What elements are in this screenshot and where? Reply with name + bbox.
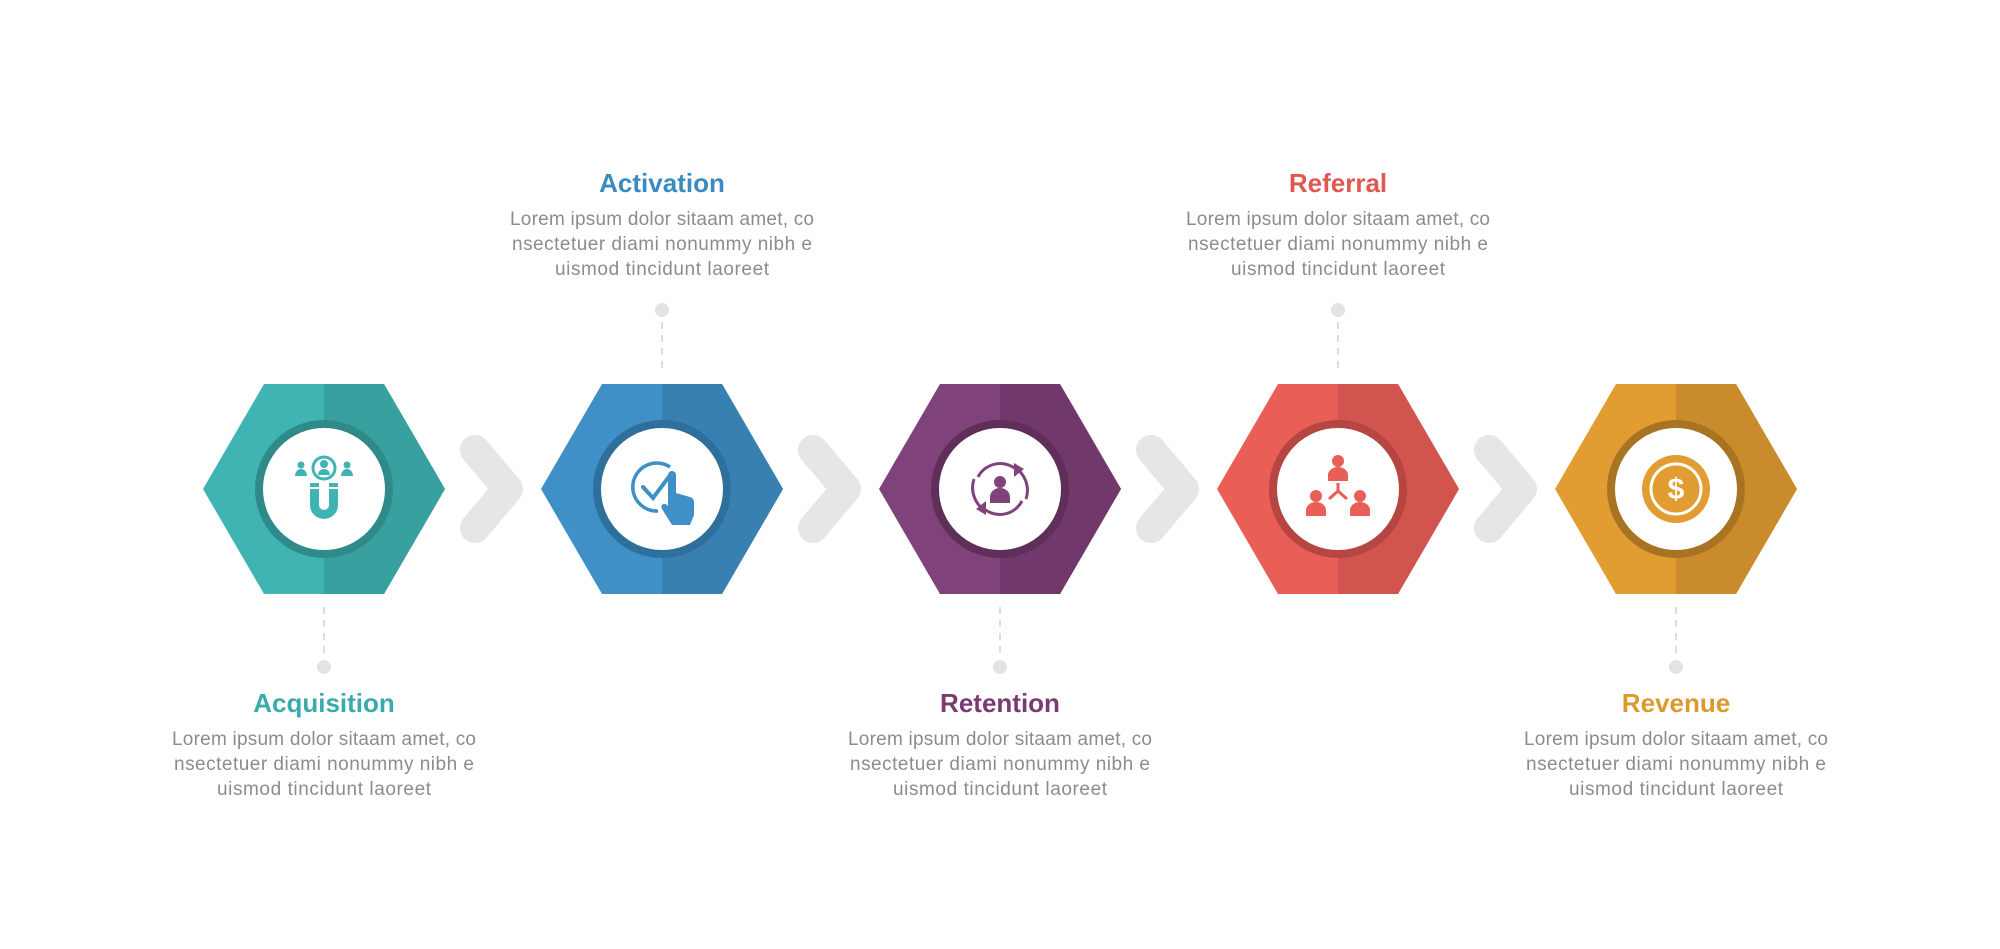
- text: activation: nsectetuer diami nonummy nibh e: [512, 234, 812, 255]
- title: retention: Retention: [940, 688, 1060, 718]
- step: referral: [1186, 168, 1490, 594]
- icon: dollar coin: [1642, 455, 1710, 523]
- text: referral: [1186, 209, 1490, 280]
- text: retention: uismod tincidunt laoreet: [893, 779, 1108, 800]
- icon: click check: [633, 463, 694, 525]
- text: acquisition: nsectetuer diami nonummy nibh e: [174, 754, 474, 775]
- title: referral: Referral: [1289, 168, 1387, 198]
- arrow: chevron 3: [1151, 450, 1184, 528]
- text: acquisition: Lorem ipsum dolor sitaam amet, co: [172, 729, 476, 750]
- text: acquisition: uismod tincidunt laoreet: [217, 779, 432, 800]
- text: revenue: uismod tincidunt laoreet: [1569, 779, 1784, 800]
- icon: dollar coin: $: [1668, 473, 1685, 506]
- connector: revenue: [1669, 607, 1683, 674]
- step: retention: [848, 384, 1152, 800]
- title: revenue: Revenue: [1622, 688, 1730, 718]
- icon: retention cycle: [973, 463, 1027, 515]
- arrow: chevron 4: [1489, 450, 1522, 528]
- text: revenue: Lorem ipsum dolor sitaam amet, co: [1524, 729, 1828, 750]
- connector: activation: [655, 303, 669, 372]
- connector: referral: [1331, 303, 1345, 372]
- step: revenue: [1524, 384, 1828, 800]
- icon: referral network: [1306, 455, 1370, 516]
- arrow: chevron 1: [475, 450, 508, 528]
- text: activation: Lorem ipsum dolor sitaam amet, co: [510, 209, 814, 230]
- hexagon: revenue: [1555, 384, 1797, 594]
- step: activation: [510, 168, 814, 594]
- hexagon: retention: [879, 384, 1121, 594]
- text: retention: nsectetuer diami nonummy nibh e: [850, 754, 1150, 775]
- text: referral: nsectetuer diami nonummy nibh e: [1188, 234, 1488, 255]
- title: acquisition: Acquisition: [253, 688, 395, 718]
- arrow: chevron 2: [813, 450, 846, 528]
- connector: retention: [993, 607, 1007, 674]
- hexagon: acquisition: [203, 384, 445, 594]
- connector: acquisition: [317, 607, 331, 674]
- text: referral: uismod tincidunt laoreet: [1231, 259, 1446, 280]
- text: referral: Lorem ipsum dolor sitaam amet, co: [1186, 209, 1490, 230]
- text: revenue: [1524, 729, 1828, 800]
- hexagon: activation: [541, 384, 783, 594]
- text: retention: [848, 729, 1152, 800]
- text: retention: Lorem ipsum dolor sitaam amet, co: [848, 729, 1152, 750]
- text: acquisition: [172, 729, 476, 800]
- text: activation: uismod tincidunt laoreet: [555, 259, 770, 280]
- text: activation: [510, 209, 814, 280]
- title: activation: Activation: [599, 168, 725, 198]
- text: revenue: nsectetuer diami nonummy nibh e: [1526, 754, 1826, 775]
- icon: magnet with people: [295, 457, 353, 519]
- step: acquisition: [172, 384, 476, 800]
- hexagon: referral: [1217, 384, 1459, 594]
